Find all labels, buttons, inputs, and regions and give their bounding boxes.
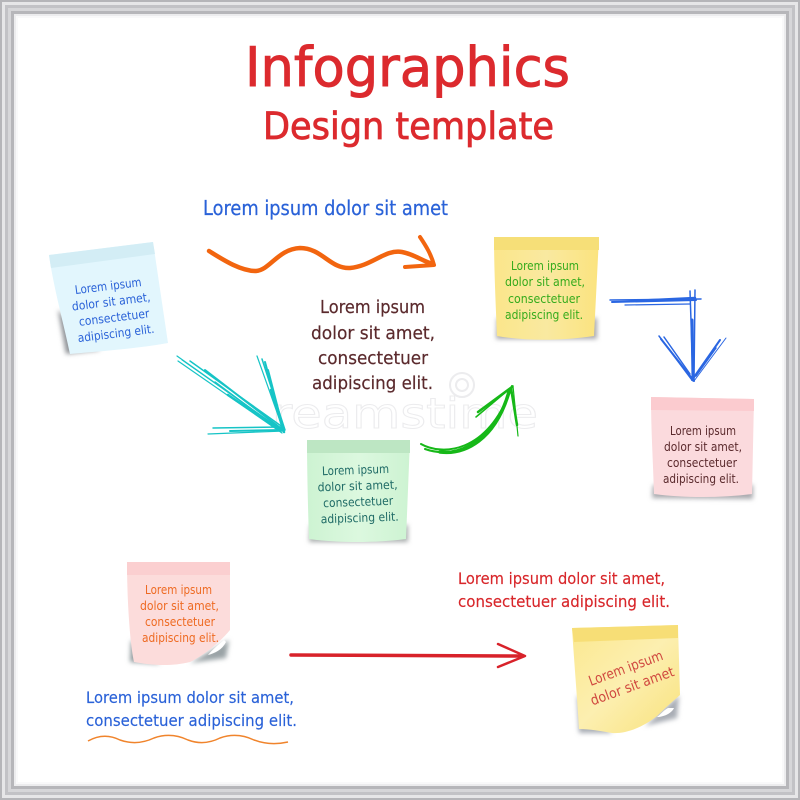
arrow: teal sketch xyxy=(177,356,285,434)
arrow: blue sketch xyxy=(610,290,726,381)
note text: dolor sit amet, xyxy=(317,478,398,494)
note text: dolor sit amet, xyxy=(505,275,585,289)
note text: consectetuer xyxy=(78,306,150,329)
blue caption xyxy=(86,688,297,730)
sticky note: peach xyxy=(127,562,230,665)
red caption: Lorem ipsum dolor sit amet, xyxy=(458,569,665,588)
blue caption: Lorem ipsum dolor sit amet, xyxy=(86,688,294,707)
center text: adipiscing elit. xyxy=(312,373,433,394)
arrow: red xyxy=(291,644,525,667)
note text: Lorem ipsum xyxy=(145,583,212,597)
note text: Lorem ipsum xyxy=(670,424,736,438)
note text: adipiscing elit. xyxy=(663,472,739,486)
center text: dolor sit amet, xyxy=(311,323,435,344)
note text: Lorem ipsum xyxy=(74,275,142,297)
note text: dolor sit amet, xyxy=(664,440,742,454)
note text: adipiscing elit. xyxy=(505,308,583,322)
note text: adipiscing elit. xyxy=(142,631,219,645)
sticky note: yellow xyxy=(494,237,599,340)
note text xyxy=(505,259,585,322)
sticky note: green xyxy=(307,440,410,542)
note text: Lorem ipsum xyxy=(322,462,389,478)
center text: consectetuer xyxy=(318,348,429,369)
sticky note: light blue xyxy=(49,242,168,354)
note text xyxy=(582,646,677,709)
note text xyxy=(663,424,742,486)
sticky note: pink xyxy=(651,397,754,499)
note text: dolor sit amet, xyxy=(71,290,151,314)
squiggle underline xyxy=(88,735,288,744)
sticky note: tilted yellow xyxy=(572,625,680,733)
note text xyxy=(69,274,155,345)
red caption xyxy=(458,569,670,611)
note text: dolor sit amet, xyxy=(140,599,219,613)
blue caption: consectetuer adipiscing elit. xyxy=(86,711,297,730)
note text: consectetuer xyxy=(508,292,580,306)
note text: consectetuer xyxy=(323,494,393,510)
note text: adipiscing elit. xyxy=(77,322,155,345)
watermark: reamstime xyxy=(272,389,538,438)
note text: dolor sit amet xyxy=(588,664,677,709)
arrow: green curved sketch xyxy=(421,386,518,452)
note text: adipiscing elit. xyxy=(320,510,399,526)
note text: Lorem ipsum xyxy=(511,259,579,273)
red caption: consectetuer adipiscing elit. xyxy=(458,592,670,611)
title xyxy=(245,36,570,148)
note text: consectetuer xyxy=(667,456,737,470)
title: Infographics xyxy=(245,36,570,99)
note text: consectetuer xyxy=(145,615,215,629)
center text xyxy=(311,297,435,394)
note text: Lorem ipsum xyxy=(587,648,665,690)
watermark xyxy=(272,373,538,438)
note text xyxy=(140,583,219,645)
center text: Lorem ipsum xyxy=(320,297,425,318)
arrow: orange wavy xyxy=(209,237,434,271)
heading: top blue caption: Lorem ipsum dolor sit amet xyxy=(203,196,448,220)
title: Design template xyxy=(263,105,554,148)
note text xyxy=(317,462,399,526)
